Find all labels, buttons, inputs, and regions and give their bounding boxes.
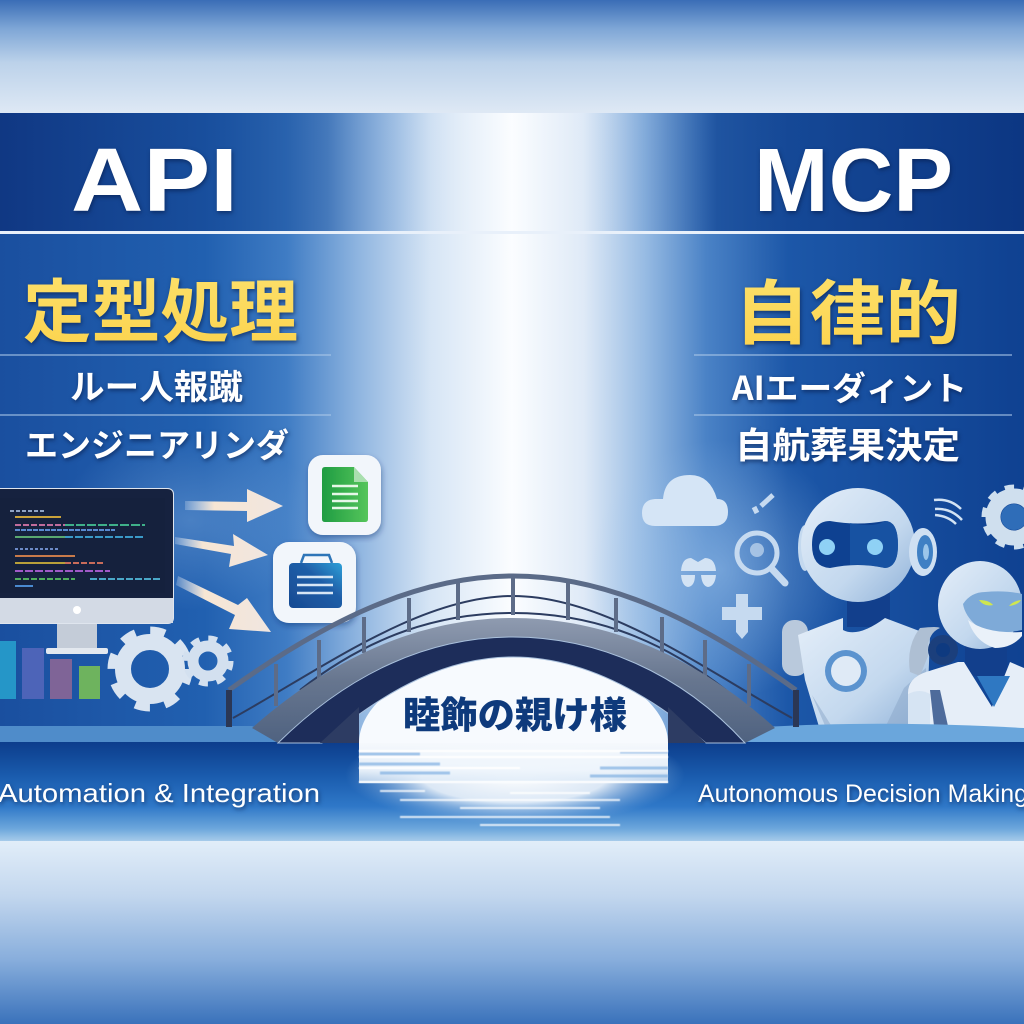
background: soft glow right <box>590 440 850 700</box>
left subheading one: ルー人報蹴 <box>70 360 243 409</box>
right divider lower <box>694 414 1012 416</box>
icon: computer monitor with code <box>0 488 174 654</box>
left column keyword: 定型処理 <box>23 256 298 356</box>
ground ledge left <box>0 726 300 744</box>
arrow: to document <box>185 489 283 522</box>
right column keyword: 自律的 <box>734 258 961 359</box>
background: central panel with light glow <box>0 113 1024 841</box>
icon: signal waves <box>934 500 962 524</box>
bridge <box>229 576 796 743</box>
header band <box>0 113 1024 231</box>
caption: right: Autonomous Decision Making <box>698 780 1024 808</box>
bridge: railing <box>229 576 796 727</box>
icon: large gear <box>113 632 187 706</box>
bar chart <box>0 641 100 699</box>
bridge: abutment right <box>668 707 706 743</box>
background: soft glow left <box>60 430 320 610</box>
caption: left: Automation & Integration <box>0 778 320 808</box>
left divider upper <box>0 354 331 356</box>
ground ledge right <box>736 724 1024 746</box>
left subheading two: エンジニアリンダ <box>25 419 289 467</box>
background: top sky band <box>0 0 1024 114</box>
icon: magnifier <box>737 533 785 583</box>
icon: right gear <box>985 488 1024 546</box>
heading: MCP: MCP <box>754 131 953 231</box>
background: bottom pale band <box>0 840 1024 1024</box>
icon: cloud <box>642 475 728 526</box>
right subheading two: 自航葬果決定 <box>735 417 960 469</box>
bridge: arch edge <box>278 637 745 743</box>
header rule <box>0 231 1024 234</box>
icon: plus glyph <box>722 594 762 639</box>
icon: small gear <box>186 639 230 683</box>
heading: API: API <box>71 131 238 231</box>
arrow: to bridge <box>176 576 271 632</box>
bridge: under-arch opening <box>359 657 668 743</box>
bridge: abutment left <box>320 707 359 743</box>
bridge: deck <box>252 618 775 743</box>
robot: main <box>782 488 958 730</box>
right subheading one: AIエーダィント <box>731 362 967 410</box>
right divider upper <box>694 354 1012 356</box>
icon: spark marks <box>754 495 773 513</box>
arrow: to briefcase <box>175 534 268 567</box>
icon: mask glyph <box>681 558 716 587</box>
robot: secondary <box>908 561 1024 728</box>
icon: green document tile <box>308 455 381 535</box>
icon: blue briefcase tile <box>273 542 356 623</box>
water <box>0 725 1024 841</box>
bridge label: 睦飾の親け様 <box>403 685 627 739</box>
left divider lower <box>0 414 331 416</box>
